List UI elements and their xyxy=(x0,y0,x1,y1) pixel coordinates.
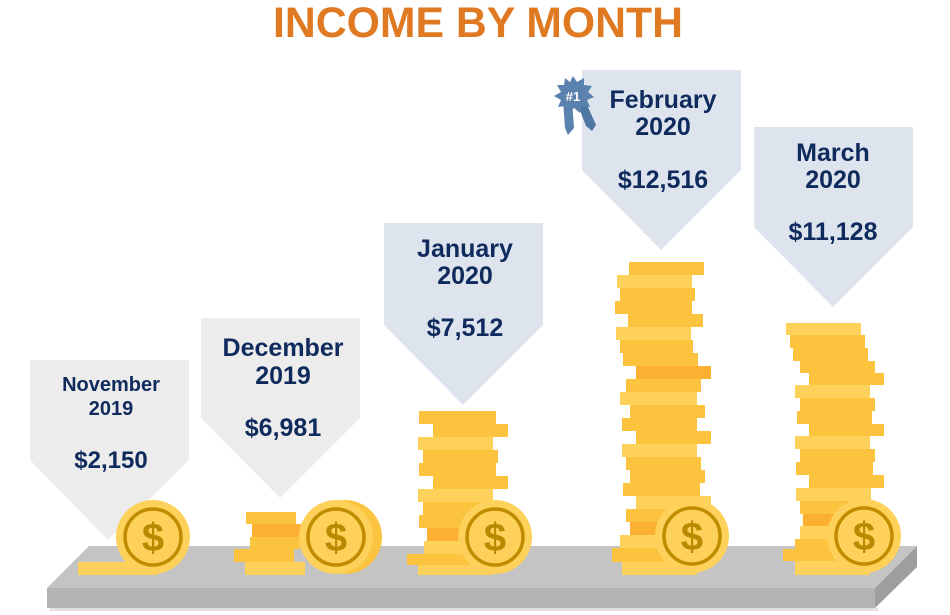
callout: January 2020: January xyxy=(417,235,513,263)
callout: February 2020: February xyxy=(610,86,717,114)
callout: November 2019: $2,150 xyxy=(74,447,148,474)
callout: February 2020: 2020 xyxy=(635,113,691,141)
callout: November 2019: 2019 xyxy=(89,398,133,420)
coin stack: November xyxy=(78,500,190,575)
callout: December 2019: $6,981 xyxy=(245,414,321,442)
callout: November 2019 xyxy=(30,360,189,540)
title: INCOME BY MONTH xyxy=(273,0,683,47)
callout: December 2019: 2019 xyxy=(255,362,311,390)
platform xyxy=(47,546,917,611)
icon: #1 ribbon: #1 xyxy=(566,89,580,104)
callout: January 2020 xyxy=(384,223,543,405)
callout: February 2020 xyxy=(582,70,741,250)
callout: February 2020: $12,516 xyxy=(618,166,708,194)
icon: #1 ribbon xyxy=(554,76,596,135)
coin stack: January xyxy=(407,411,532,575)
callout: March 2020: $11,128 xyxy=(788,218,878,246)
callout: November 2019: November xyxy=(62,374,160,396)
callout: January 2020: 2020 xyxy=(437,262,493,290)
callout: March 2020 xyxy=(754,127,913,307)
callout: December 2019 xyxy=(201,318,360,498)
callout: December 2019: December xyxy=(223,334,344,362)
coin stack: March xyxy=(783,323,901,575)
coin stack: February xyxy=(612,262,729,575)
callout: March 2020: 2020 xyxy=(805,166,861,194)
coin stack: December xyxy=(234,500,382,575)
callout: January 2020: $7,512 xyxy=(427,314,503,342)
callout: March 2020: March xyxy=(796,139,870,167)
